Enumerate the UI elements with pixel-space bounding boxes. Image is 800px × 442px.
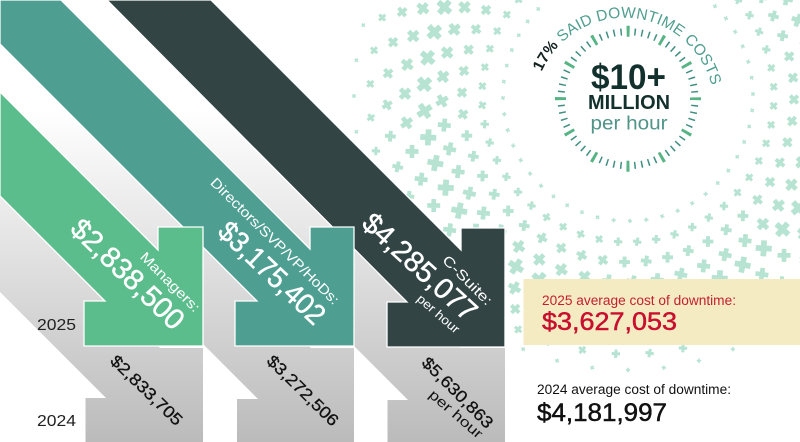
label: Directors 2024: $3,272,506 (263, 352, 342, 430)
label: C-Suite 2025: per hour (414, 292, 462, 336)
arrow: 2024 Managers (0, 188, 203, 442)
label: C-Suite 2025: $4,285,077 (355, 207, 483, 328)
callout: 2025 average: $3,627,053 (542, 308, 677, 336)
callout: 2024 average: $4,181,997 (537, 399, 667, 427)
2024 gray arrows (0, 0, 505, 442)
year label 2024: 2024 (37, 413, 76, 430)
label: Managers 2025: $2,838,500 (64, 213, 190, 337)
curved heading: 17% SAID DOWNTIME COSTS (534, 6, 721, 84)
label: Directors 2025 (207, 174, 343, 332)
callout: 2025 average (524, 279, 800, 345)
label: Directors 2025: Directors/SVP/VP/HoDs: (207, 174, 343, 308)
callout: 2025 average: 2025 average cost of downtime: (542, 293, 736, 308)
year label 2025: 2025 (37, 317, 76, 334)
clock dial ticks (560, 31, 696, 166)
clock figure: $10+ (591, 58, 666, 97)
clock figure: MILLION (588, 92, 670, 114)
arrow: 2024 C-Suite (0, 0, 505, 442)
label: Managers 2025: Managers: (137, 249, 204, 315)
background cross pattern (349, 0, 800, 374)
label: C-Suite 2024: $5,630,863 (418, 354, 496, 432)
arrow: 2025 Managers (0, 92, 203, 346)
label: C-Suite 2024: per hour (426, 386, 487, 442)
arrow: 2025 C-Suite (107, 0, 505, 347)
clock figure (588, 58, 670, 134)
label: Directors 2025: $3,175,402 (211, 215, 331, 332)
callout: 2024 average (537, 382, 731, 427)
label: Managers 2024: $2,833,705 (106, 352, 186, 429)
callout: 2024 average: 2024 average cost of downtime: (537, 382, 731, 397)
label: C-Suite 2025: C-Suite: (439, 252, 496, 308)
arrow: 2024 Directors (0, 37, 354, 442)
clock figure: per hour (590, 114, 668, 134)
arrow: 2025 Directors (0, 0, 354, 346)
